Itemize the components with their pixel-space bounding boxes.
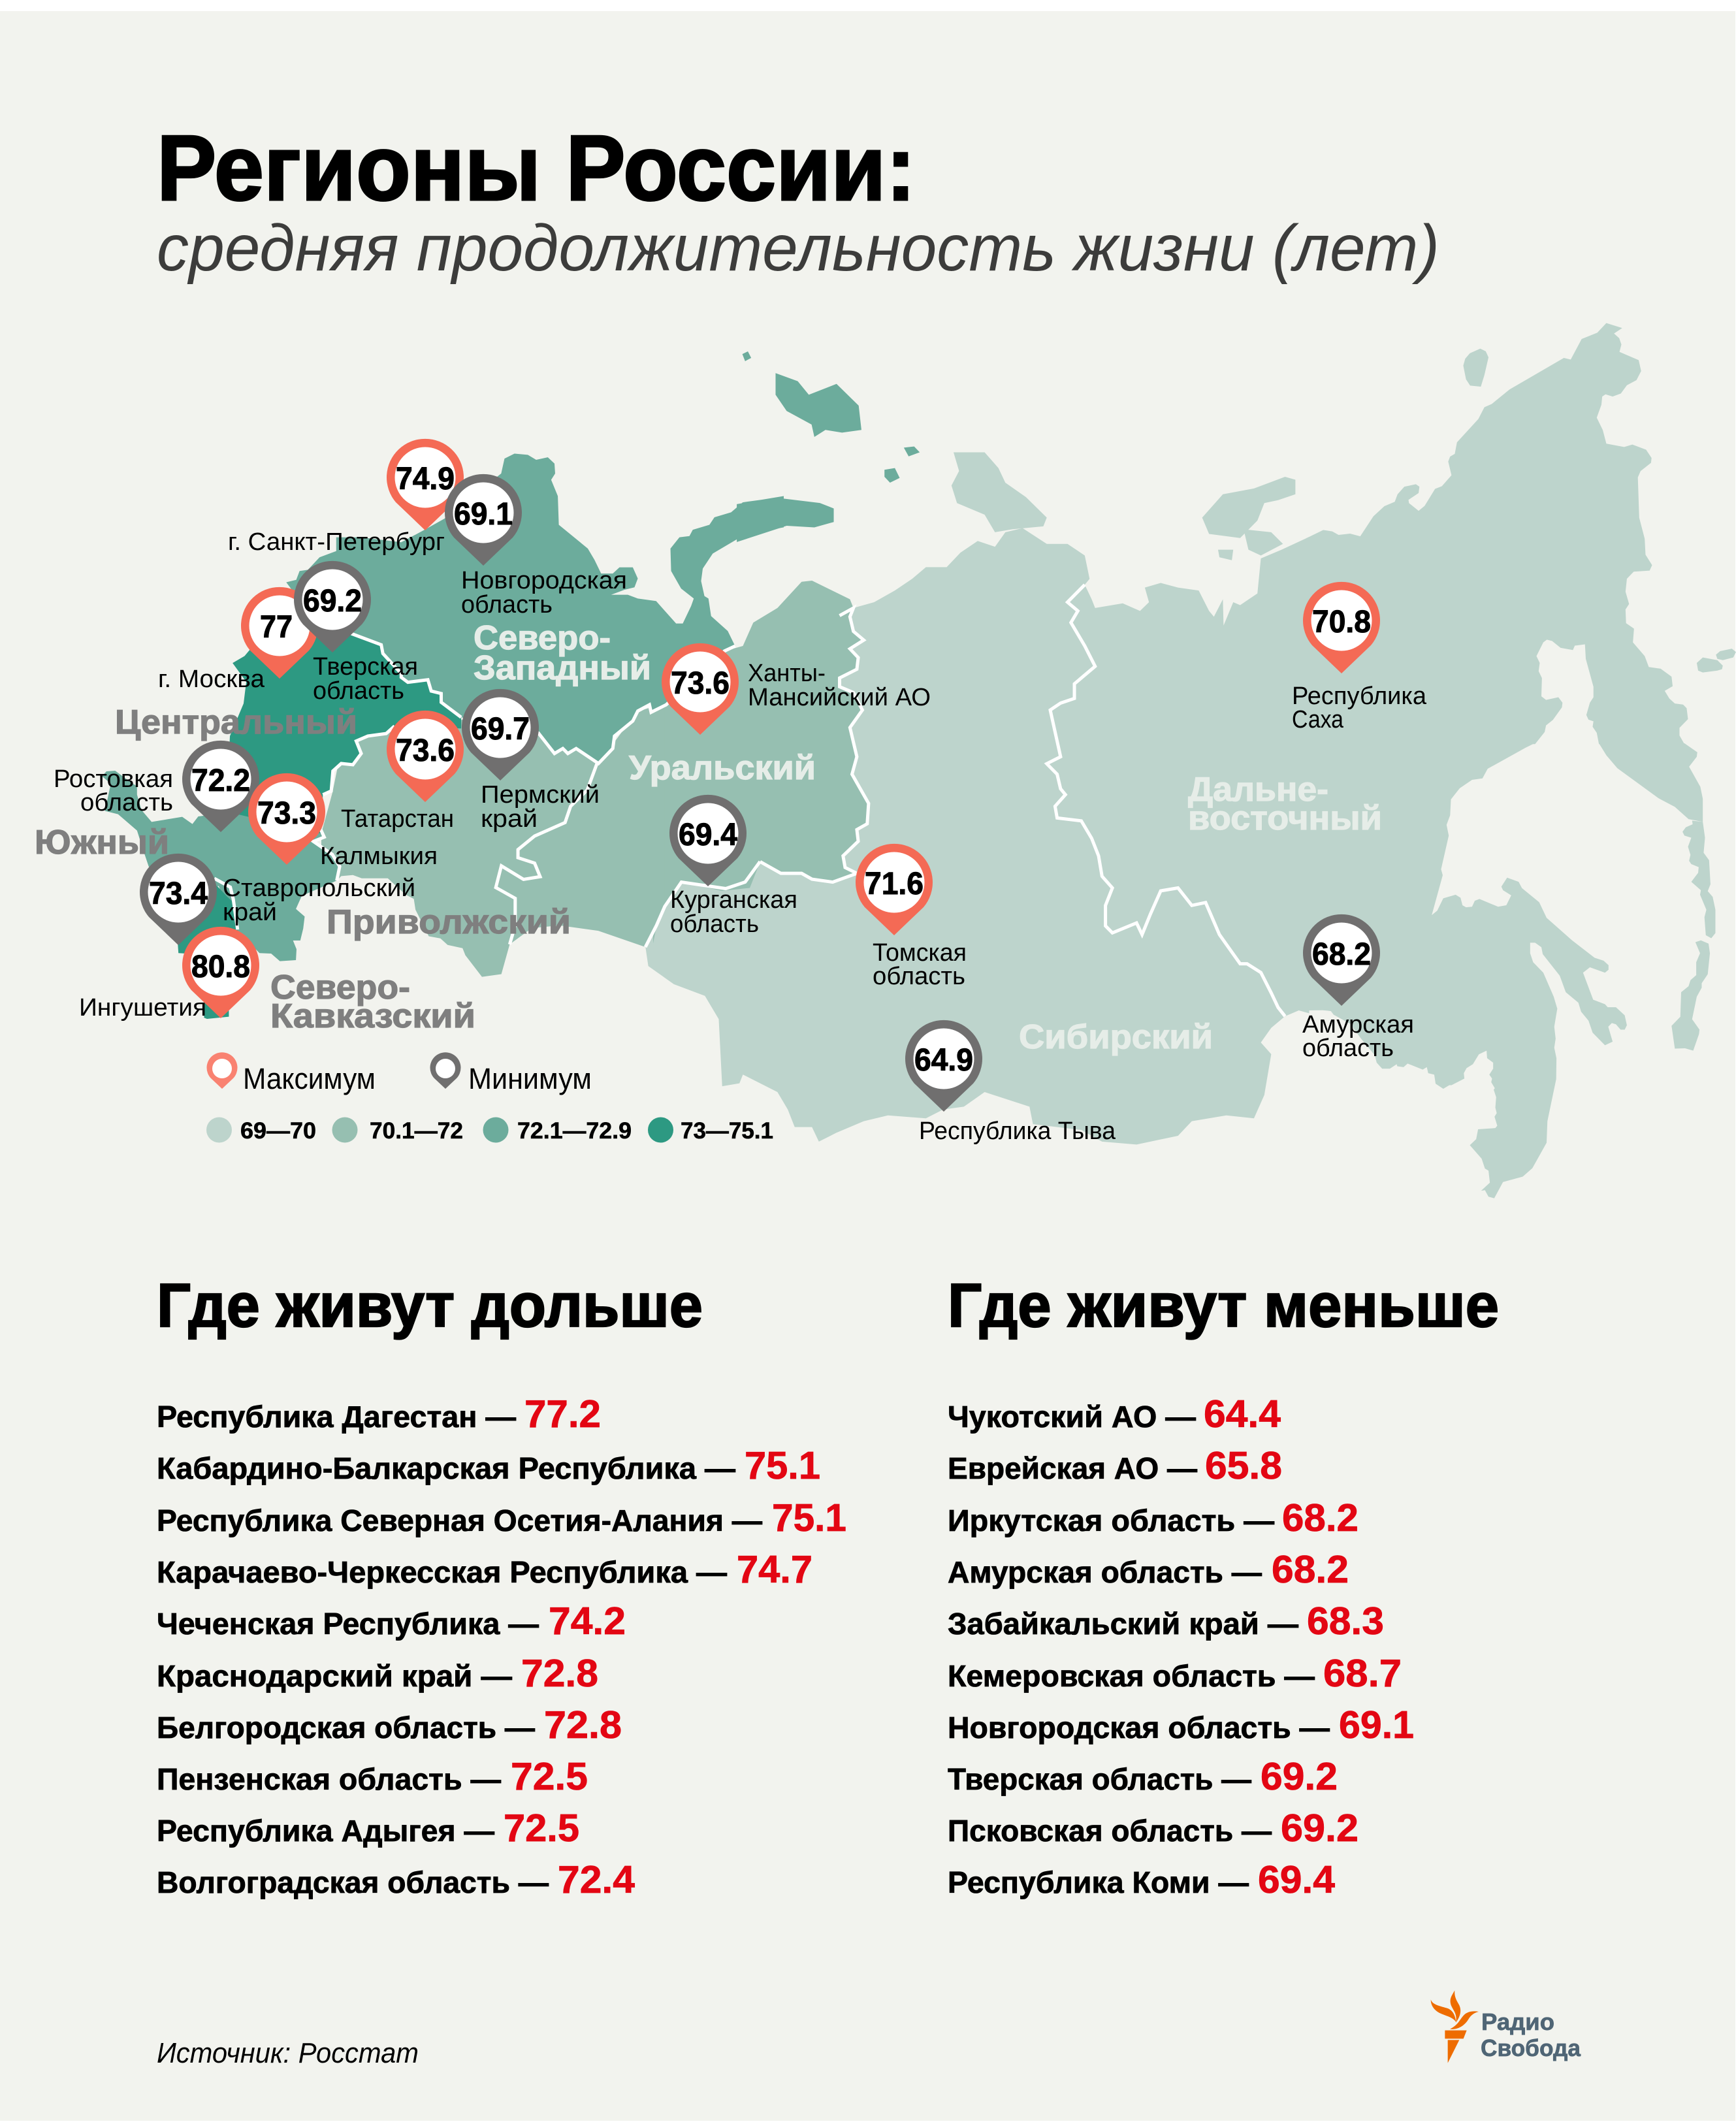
pin: Kalmykia 73.3 xyxy=(248,773,325,865)
pin: Kalmykia 73.3: 73.3 xyxy=(257,796,316,831)
list: live shorter: 68.3 xyxy=(1307,1600,1384,1643)
pin: Kurgan 69.4 xyxy=(669,795,747,886)
legend xyxy=(206,1052,773,1144)
legend: scale 70.1-72: 70.1—72 xyxy=(370,1118,463,1144)
place labels: Саха xyxy=(1292,706,1344,733)
place labels: Мансийский АО xyxy=(748,684,931,711)
list: live shorter: 69.2 xyxy=(1281,1807,1358,1850)
pin: Ingushetia 80.8 xyxy=(182,927,259,1018)
pin: Novgorod 69.1 xyxy=(445,474,522,566)
list: live shorter: Амурская область — xyxy=(948,1555,1262,1589)
region names: Южный xyxy=(35,824,169,861)
list: live longer: Белгородская область — xyxy=(157,1711,535,1745)
list: live longer: 72.5 xyxy=(504,1807,579,1850)
place labels: область xyxy=(80,789,173,816)
list: live shorter: Кемеровская область — xyxy=(948,1659,1315,1693)
place labels: Республика Тыва xyxy=(919,1118,1116,1145)
logo: Radio Svoboda: Свобода xyxy=(1481,2035,1581,2061)
region borders xyxy=(214,585,1285,1016)
pin: Moscow 77 xyxy=(241,587,318,679)
region names xyxy=(35,619,1382,1056)
pin: Rostov 72.2 xyxy=(182,741,259,832)
legend: minimum: Минимум xyxy=(468,1062,592,1095)
region: Far East north-east coast xyxy=(1306,323,1736,744)
heading: live longer: Где живут дольше xyxy=(157,1271,703,1340)
place labels: Курганская xyxy=(670,886,797,914)
list: live longer: Кабардино-Балкарская Республика — xyxy=(157,1451,735,1485)
place labels: Новгородская xyxy=(461,567,627,594)
region: Siberia and Far East west part xyxy=(645,453,1310,1144)
pin: Saint Petersburg 74.9: 74.9 xyxy=(396,462,455,496)
place labels: край xyxy=(223,899,277,926)
pin: Tyva 64.9 xyxy=(905,1020,982,1112)
list: live longer: 72.8 xyxy=(544,1703,622,1746)
list: live longer: 75.1 xyxy=(745,1444,820,1487)
place labels: область xyxy=(670,910,759,938)
list: live longer: 74.2 xyxy=(549,1600,626,1643)
legend: scale 69-70 xyxy=(206,1117,316,1144)
legend: maximum: Максимум xyxy=(243,1062,376,1095)
region: South and North Caucasus xyxy=(102,771,340,1019)
pin: Stavropol 73.4 xyxy=(140,854,217,945)
place labels: г. Москва xyxy=(158,666,265,693)
list: live shorter: 69.4 xyxy=(1258,1858,1335,1901)
list: live shorter: Иркутская область — xyxy=(948,1504,1274,1537)
place labels: г. Санкт-Петербург xyxy=(228,528,445,556)
pin: Sakha 70.8: 70.8 xyxy=(1312,605,1371,639)
pin: Khanty-Mansi 73.6 xyxy=(662,643,739,735)
list: live longer: Пензенская область — xyxy=(157,1762,501,1796)
logo: Radio Svoboda xyxy=(1431,1990,1581,2063)
list: live shorter xyxy=(948,1392,1414,1901)
place labels: Пермский xyxy=(481,781,600,809)
list: live longer: Краснодарский край — xyxy=(157,1659,512,1693)
source note: Источник: Росстат xyxy=(157,2037,419,2069)
pin: Rostov 72.2: 72.2 xyxy=(191,764,250,798)
pin: Amur 68.2: 68.2 xyxy=(1312,937,1371,972)
place labels: край xyxy=(481,805,538,833)
pin: Novgorod 69.1: 69.1 xyxy=(454,497,513,532)
list: live shorter: Чукотский АО — xyxy=(948,1400,1196,1434)
list: live shorter: 69.1 xyxy=(1339,1703,1414,1746)
map of Russia xyxy=(102,323,1736,1199)
place labels: Тверская xyxy=(313,653,418,681)
list: live shorter: Псковская область — xyxy=(948,1814,1272,1848)
region names: Сибирский xyxy=(1019,1018,1213,1056)
place labels xyxy=(54,528,1427,1145)
pin: Ingushetia 80.8: 80.8 xyxy=(191,950,250,984)
pin: Moscow 77: 77 xyxy=(260,610,293,645)
subtitle: средняя продолжительность жизни (лет) xyxy=(157,212,1439,285)
place labels: область xyxy=(313,677,404,705)
legend: scale 70.1-72 xyxy=(332,1117,463,1144)
region names: Кавказский xyxy=(270,997,475,1035)
pin: Tatarstan 73.6: 73.6 xyxy=(396,733,455,768)
region names: Уральский xyxy=(629,749,816,787)
list: live longer: 77.2 xyxy=(524,1392,601,1436)
title: Регионы России: xyxy=(157,116,916,220)
region: Far East south-east coast xyxy=(1298,743,1715,1199)
list: live shorter: 64.4 xyxy=(1204,1392,1281,1436)
pin: Khanty-Mansi 73.6: 73.6 xyxy=(671,666,730,701)
region names: восточный xyxy=(1188,799,1382,837)
region: peninsula tip and arctic island xyxy=(737,351,861,542)
region names: Приволжский xyxy=(327,903,571,941)
list: live shorter: Еврейская АО — xyxy=(948,1451,1197,1485)
pin: Sakha 70.8 xyxy=(1303,582,1380,673)
list: live longer: Республика Адыгея — xyxy=(157,1814,494,1848)
region names: Дальне- xyxy=(1188,771,1328,809)
logo: Radio Svoboda: Радио xyxy=(1481,2008,1554,2035)
list: live longer: 75.1 xyxy=(772,1496,846,1539)
list: live longer: Республика Северная Осетия-Алания — xyxy=(157,1504,762,1537)
list: live longer: 72.5 xyxy=(511,1755,588,1798)
list: live longer: 72.4 xyxy=(558,1858,635,1901)
list: live shorter: 69.2 xyxy=(1261,1755,1338,1798)
list: live shorter: 65.8 xyxy=(1205,1444,1282,1487)
place labels: Амурская xyxy=(1302,1011,1414,1038)
pin: Kurgan 69.4: 69.4 xyxy=(679,818,737,852)
list: live longer: 74.7 xyxy=(737,1548,812,1591)
region: Volga and Ural west xyxy=(321,703,665,977)
legend: scale 73-75.1: 73—75.1 xyxy=(681,1118,773,1144)
list: live longer xyxy=(157,1392,846,1901)
list: live shorter: 68.2 xyxy=(1272,1548,1349,1591)
list: live shorter: Тверская область — xyxy=(948,1762,1251,1796)
pin: Stavropol 73.4: 73.4 xyxy=(149,877,208,911)
list: live longer: 72.8 xyxy=(521,1652,598,1695)
place labels: Ханты- xyxy=(748,660,826,687)
region names: Северо- xyxy=(474,619,611,657)
place labels: область xyxy=(873,963,965,990)
icon: torch xyxy=(1431,1990,1479,2063)
place labels: Ингушетия xyxy=(79,994,206,1022)
region: dark Caucasus areas xyxy=(175,884,238,1019)
list: live shorter: Республика Коми — xyxy=(948,1865,1249,1899)
pin: Perm 69.7: 69.7 xyxy=(471,712,530,747)
list: live shorter: Забайкальский край — xyxy=(948,1607,1298,1641)
list: live longer: Волгоградская область — xyxy=(157,1865,549,1899)
pin: Saint Petersburg 74.9 xyxy=(387,439,464,530)
place labels: область xyxy=(461,591,553,619)
legend: minimum xyxy=(430,1052,592,1095)
list: live shorter: 68.2 xyxy=(1282,1496,1358,1539)
region: North-West xyxy=(228,453,784,833)
region: Ural east xyxy=(653,581,869,943)
legend: scale 69-70: 69—70 xyxy=(240,1118,316,1144)
place labels: область xyxy=(1302,1035,1394,1062)
legend: maximum xyxy=(206,1052,376,1095)
list: live shorter: 68.7 xyxy=(1323,1652,1402,1695)
place labels: Ставропольский xyxy=(223,875,415,902)
place labels: Республика xyxy=(1292,683,1427,710)
arctic islands east xyxy=(884,447,920,483)
list: live longer: Чеченская Республика — xyxy=(157,1607,539,1641)
list: live longer: Карачаево-Черкесская Республика — xyxy=(157,1555,727,1589)
pin: Tatarstan 73.6 xyxy=(387,711,464,802)
pin: Tver 69.2 xyxy=(294,561,371,652)
list: live shorter: Новгородская область — xyxy=(948,1711,1330,1745)
pin: Tyva 64.9: 64.9 xyxy=(914,1043,973,1078)
place labels: Татарстан xyxy=(341,805,454,833)
region names: Западный xyxy=(474,649,651,687)
list: live longer: Республика Дагестан — xyxy=(157,1400,516,1434)
region: Central xyxy=(228,606,461,833)
region names: Северо- xyxy=(270,969,410,1006)
legend: scale 72.1-72.9: 72.1—72.9 xyxy=(517,1118,632,1144)
pin: Amur 68.2 xyxy=(1303,914,1380,1006)
place labels: Калмыкия xyxy=(320,843,438,870)
pin: Tomsk 71.6 xyxy=(856,844,933,935)
heading: live shorter: Где живут меньше xyxy=(948,1271,1499,1340)
pin: Perm 69.7 xyxy=(462,689,539,780)
region names: Центральный xyxy=(115,703,357,741)
place labels: Томская xyxy=(873,939,967,967)
place labels: Ростовкая xyxy=(54,765,173,793)
pin: Tver 69.2: 69.2 xyxy=(303,584,362,619)
pin: Tomsk 71.6: 71.6 xyxy=(865,867,924,901)
